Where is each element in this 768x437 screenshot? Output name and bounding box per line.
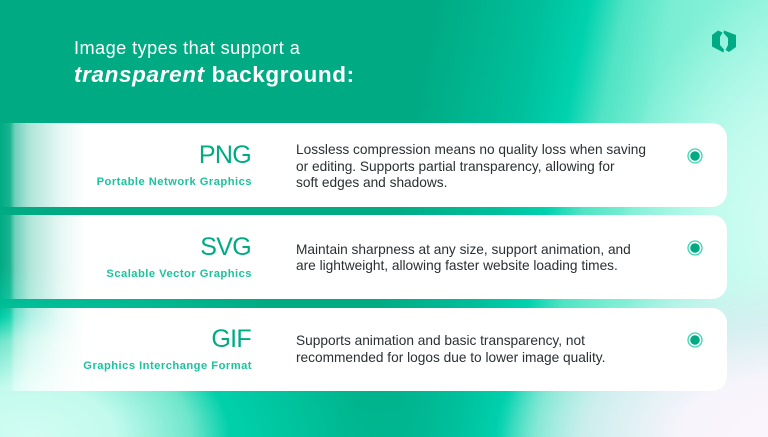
SVG subtitle: Scalable Vector Graphics — [106, 268, 252, 280]
GIF description: Supports animation and basic transparency, not — [296, 333, 585, 348]
PNG description: Lossless compression means no quality loss when saving — [296, 142, 646, 157]
PNG description: or editing. Supports partial transparency, allowing for — [296, 159, 615, 174]
SVG description — [296, 242, 631, 273]
icon: PNG radio check — [687, 148, 703, 164]
panel: GIF — [0, 308, 727, 391]
icon: SVG radio check — [687, 240, 703, 256]
title line 1: Image types that support a — [74, 38, 300, 58]
PNG description: soft edges and shadows. — [296, 175, 447, 190]
logo icon — [712, 30, 736, 52]
SVG heading: SVG — [200, 233, 251, 261]
title line 2: transparent background: — [74, 62, 355, 87]
PNG description — [296, 142, 646, 190]
icon: GIF radio check — [687, 332, 703, 348]
GIF description: recommended for logos due to lower image quality. — [296, 350, 605, 365]
SVG description: Maintain sharpness at any size, support animation, and — [296, 242, 631, 256]
GIF heading: GIF — [211, 325, 251, 353]
GIF subtitle: Graphics Interchange Format — [83, 360, 252, 372]
SVG description: are lightweight, allowing faster website loading times. — [296, 258, 618, 273]
panel: SVG — [0, 215, 727, 299]
title — [74, 38, 355, 87]
PNG subtitle: Portable Network Graphics — [97, 176, 252, 188]
panel: PNG — [0, 122, 727, 206]
PNG heading: PNG — [199, 140, 251, 168]
GIF description — [296, 333, 605, 365]
